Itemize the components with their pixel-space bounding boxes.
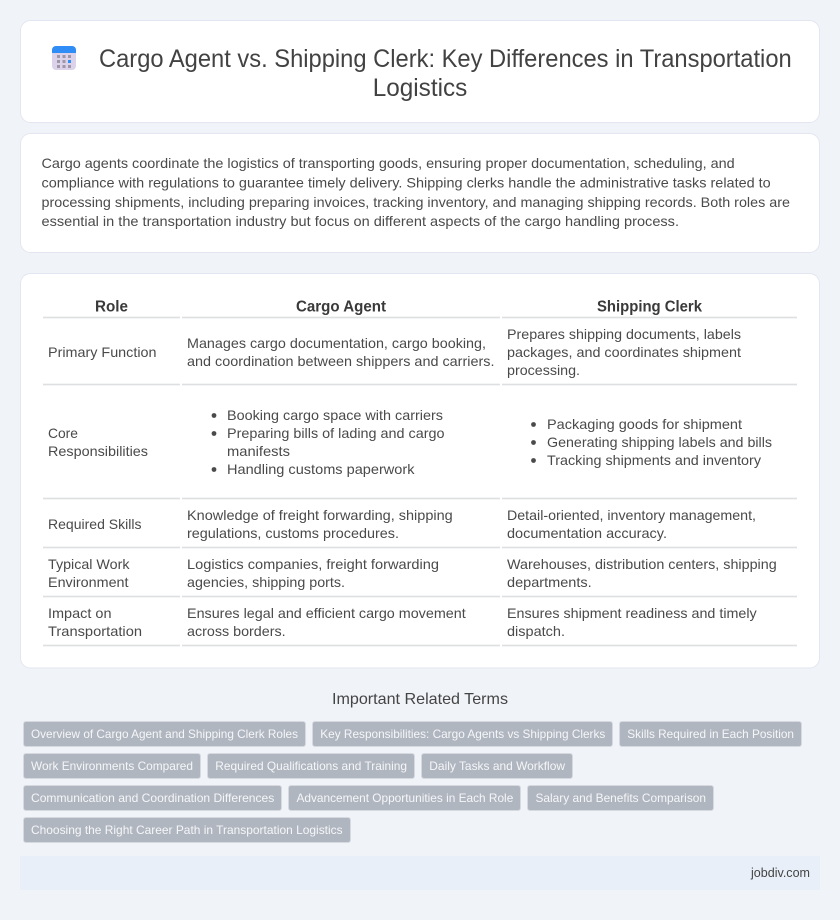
footer [20, 856, 820, 890]
related terms chips: Required Qualifications and Training [215, 759, 407, 773]
text block: introduction: processing shipments, including preparing invoices, tracking inventory, and managing shipping records. Both roles are [42, 194, 790, 210]
panel: title card [20, 20, 820, 122]
row: typical work environment: Logistics companies, freight forwarding [187, 556, 439, 572]
table header: Cargo Agent [296, 298, 387, 316]
row: required skills: documentation accuracy. [507, 525, 667, 541]
related terms chips: Communication and Coordination Differences [31, 791, 274, 805]
row: typical work environment: Environment [48, 574, 129, 590]
title: Logistics [373, 74, 467, 102]
related terms chips [24, 722, 802, 842]
text block: introduction: compliance with regulations to guarantee timely delivery. Shipping clerks handle the administrative tasks related to [42, 174, 771, 190]
table header [95, 298, 702, 316]
title: Cargo Agent vs. Shipping Clerk: Key Differences in Transportation [99, 45, 792, 73]
row: core responsibilities: Generating shipping labels and bills [547, 434, 772, 450]
row: core responsibilities: Responsibilities [48, 443, 148, 459]
related terms chips: Key Responsibilities: Cargo Agents vs Shipping Clerks [320, 727, 605, 741]
row: required skills: regulations, customs procedures. [187, 525, 399, 541]
panel: comparison table [20, 274, 820, 668]
row: core responsibilities: Packaging goods for shipment [547, 416, 742, 432]
related terms chips: Daily Tasks and Workflow [429, 759, 565, 773]
text block: introduction [42, 155, 790, 229]
related terms chips: Choosing the Right Career Path in Transportation Logistics [31, 823, 343, 837]
row: typical work environment: departments. [507, 574, 592, 590]
row: core responsibilities: manifests [227, 443, 290, 459]
row: typical work environment: agencies, shipping ports. [187, 574, 345, 590]
related terms chips: Advancement Opportunities in Each Role [296, 791, 514, 805]
row: core responsibilities: Handling customs paperwork [227, 461, 416, 477]
row: impact on transportation: Ensures shipment readiness and timely [507, 605, 757, 621]
row: core responsibilities [48, 407, 772, 477]
row: impact on transportation [48, 605, 757, 639]
row: core responsibilities: Preparing bills of lading and cargo [227, 425, 445, 441]
row: primary function: and coordination between shippers and carriers. [187, 353, 495, 369]
text block: introduction: essential in the transportation industry but focus on different aspects of the cargo handling process. [42, 213, 679, 229]
row: core responsibilities: Core [48, 425, 78, 441]
related terms chips: Salary and Benefits Comparison [536, 791, 706, 805]
footer: jobdiv.com [750, 866, 810, 880]
row: core responsibilities: Tracking shipments and inventory [547, 452, 761, 468]
related terms chips: Work Environments Compared [31, 759, 193, 773]
icon: calendar [52, 46, 76, 70]
row: core responsibilities: Booking cargo space with carriers [227, 407, 443, 423]
row: impact on transportation: dispatch. [507, 623, 565, 639]
table header: Role [95, 298, 128, 316]
row: primary function: Manages cargo documentation, cargo booking, [187, 335, 486, 351]
row: impact on transportation: Ensures legal and efficient cargo movement [187, 605, 466, 621]
row: primary function: packages, and coordinates shipment [507, 344, 741, 360]
related terms chips: Overview of Cargo Agent and Shipping Clerk Roles [31, 727, 298, 741]
row: primary function: processing. [507, 362, 580, 378]
heading: important related terms: Important Related Terms [332, 691, 508, 708]
row: typical work environment: Typical Work [48, 556, 131, 572]
row: primary function: Primary Function [48, 344, 156, 360]
related terms chips: Skills Required in Each Position [627, 727, 794, 741]
row: impact on transportation: across borders. [187, 623, 286, 639]
row: required skills [48, 507, 756, 541]
row: required skills: Required Skills [48, 516, 142, 532]
row: typical work environment: Warehouses, distribution centers, shipping [507, 556, 777, 572]
row: impact on transportation: Transportation [48, 623, 142, 639]
row: impact on transportation: Impact on [48, 605, 112, 621]
title [99, 45, 792, 102]
panel: introduction [20, 134, 820, 252]
row: typical work environment [48, 556, 777, 590]
text block: introduction: Cargo agents coordinate the logistics of transporting goods, ensuring proper documentation, scheduling, and [42, 155, 735, 171]
row: primary function [48, 326, 741, 378]
row: primary function: Prepares shipping documents, labels [507, 326, 741, 342]
row: required skills: Knowledge of freight forwarding, shipping [187, 507, 453, 523]
table header: Shipping Clerk [597, 298, 702, 316]
row: required skills: Detail-oriented, inventory management, [507, 507, 756, 523]
